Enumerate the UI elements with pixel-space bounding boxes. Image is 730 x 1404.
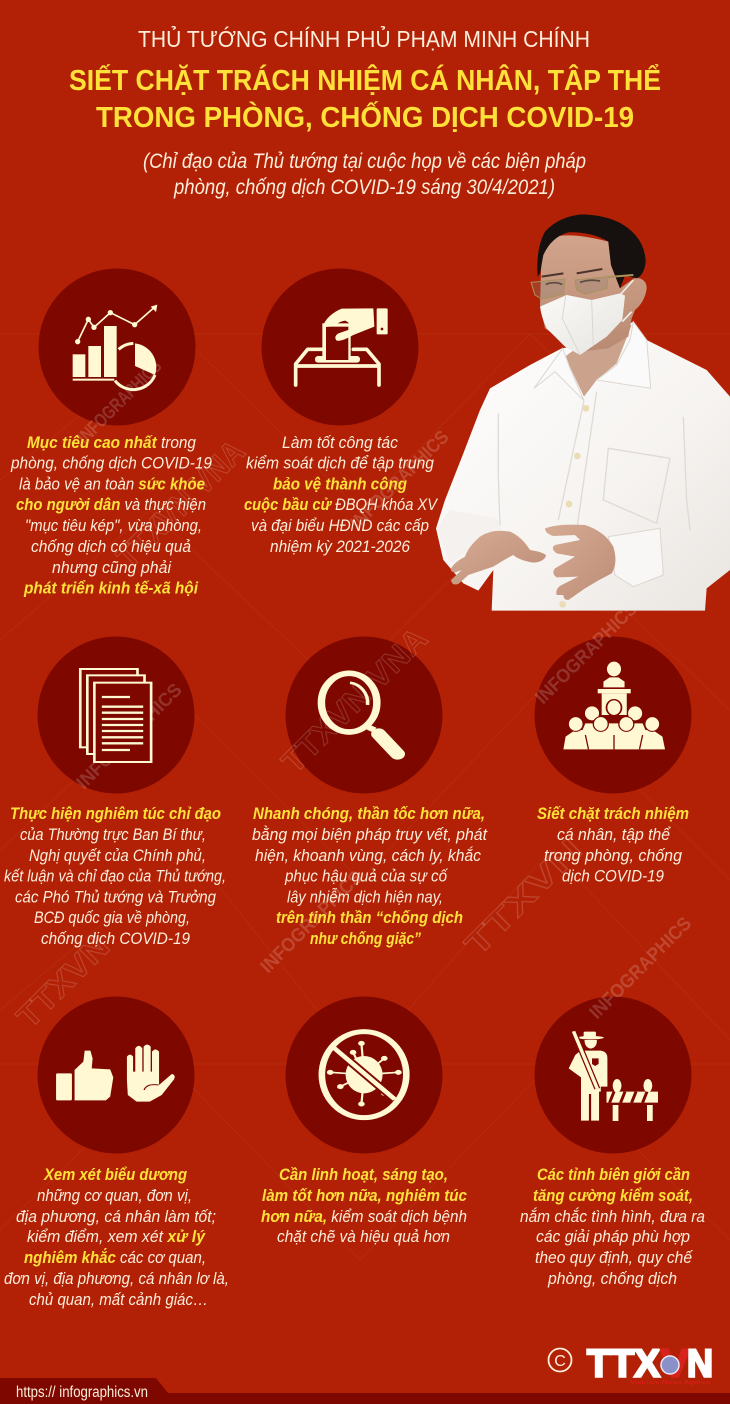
agency tagline: Vietnam News Agency — [630, 1380, 712, 1386]
icon: magnifier — [321, 673, 398, 754]
text: highest goal: "mục tiêu kép", vừa phòng, — [25, 517, 202, 535]
text: speed: hiện, khoanh vùng, cách ly, khắc — [255, 846, 482, 865]
watermarks — [9, 356, 696, 1035]
text: directives: kết luận và chỉ đạo của Thủ tướng, — [4, 868, 226, 886]
text: directives: của Thường trực Ban Bí thư, — [20, 826, 206, 844]
icon: copyright symbol: C — [554, 1353, 566, 1370]
text: border control: tăng cường kiểm soát, — [533, 1187, 693, 1205]
logo globe — [661, 1356, 679, 1374]
logo letter N: N — [687, 1342, 713, 1386]
watermarks: INFOGRAPHICS — [586, 913, 696, 1024]
watermarks: INFOGRAPHICS — [257, 867, 367, 978]
text: responsibility — [537, 805, 689, 886]
text: directives: chống dịch COVID-19 — [41, 930, 190, 948]
text: election: và đại biểu HĐND các cấp — [251, 517, 429, 535]
text: highest goal: Mục tiêu cao nhất trong — [27, 434, 197, 452]
text: directives — [4, 805, 226, 948]
logo letter V: V — [661, 1342, 689, 1386]
panel: responsibility — [537, 662, 689, 886]
hands — [451, 525, 615, 600]
panel: circles background row 1 — [38, 268, 418, 426]
text: flexible control: làm tốt hơn nữa, nghiêm túc — [262, 1187, 467, 1205]
text: highest goal: chống dịch có hiệu quả — [31, 538, 191, 556]
shirt — [436, 322, 730, 611]
panel: directives — [4, 669, 226, 948]
text: directives: các Phó Thủ tướng và Trưởng — [15, 888, 217, 906]
text: flexible control — [261, 1166, 467, 1246]
text: commend and discipline: những cơ quan, đơn vị, — [37, 1187, 192, 1205]
logo text TTX: TTX — [587, 1342, 660, 1386]
text: border control: Các tỉnh biên giới cần — [537, 1166, 690, 1184]
icon: documents — [80, 669, 151, 762]
logo: copyright TTXVN — [548, 1342, 713, 1386]
photo: Prime Minister in white shirt and mask — [436, 214, 730, 611]
text: highest goal: phòng, chống dịch COVID-19 — [10, 454, 212, 472]
watermarks: TTXVN — [9, 928, 116, 1035]
text: border control: nắm chắc tình hình, đưa ra — [520, 1207, 705, 1226]
text: commend and discipline: chủ quan, mất cảnh giác… — [29, 1291, 208, 1309]
subtitle line 2: phòng, chống dịch COVID-19 sáng 30/4/2021) — [173, 176, 555, 199]
icon: thumbs up and stop hand — [56, 1045, 175, 1102]
text: speed: lây nhiễm dịch hiện nay, — [287, 888, 443, 906]
subtitle line 1: (Chỉ đạo của Thủ tướng tại cuộc họp về các biện pháp — [143, 150, 586, 173]
panel: circles background row 3 — [38, 996, 692, 1154]
header — [69, 24, 661, 199]
text: commend and discipline: địa phương, cá nhân làm tốt; — [16, 1208, 216, 1226]
watermarks: INFOGRAPHICS — [73, 680, 187, 794]
panel: commend and discipline — [4, 1045, 229, 1309]
text: responsibility: Siết chặt trách nhiệm — [537, 805, 689, 823]
icon: border guard and barrier — [569, 1031, 658, 1121]
text: speed: bằng mọi biện pháp truy vết, phát — [252, 825, 488, 844]
text: highest goal: nhưng cũng phải — [52, 559, 172, 577]
icon: chart and pie — [73, 305, 157, 390]
text: flexible control: Cần linh hoạt, sáng tạo, — [279, 1166, 448, 1184]
text: speed — [252, 805, 488, 948]
icon: speaker and audience — [563, 662, 665, 749]
text: border control — [520, 1166, 705, 1288]
watermarks: INFOGRAPHICS — [532, 598, 642, 709]
text: election: cuộc bầu cử ĐBQH khóa XV — [244, 496, 439, 514]
panel: speed — [252, 673, 488, 948]
text: election: bảo vệ thành công — [273, 476, 407, 494]
text: flexible control: chặt chẽ và hiệu quả hơn — [277, 1228, 450, 1246]
text: border control: các giải pháp phù hợp — [536, 1228, 690, 1246]
panel: highest goal — [10, 305, 212, 598]
text: directives: Thực hiện nghiêm túc chỉ đạo — [10, 805, 221, 823]
text: commend and discipline — [4, 1166, 229, 1309]
text: election — [244, 434, 439, 556]
watermarks: TTXVN — [457, 831, 589, 963]
text: commend and discipline: đơn vị, địa phương, cá nhân lơ là, — [4, 1270, 229, 1288]
footer bar — [0, 1378, 730, 1404]
website url: https:// infographics.vn — [16, 1384, 148, 1401]
text: speed: như chống giặc” — [310, 930, 422, 948]
text: directives: BCĐ quốc gia về phòng, — [34, 909, 190, 927]
text: speed: phục hậu quả của sự cố — [284, 868, 449, 886]
panel: border control — [520, 1031, 705, 1288]
watermarks: INFOGRAPHICS — [74, 356, 166, 449]
text: responsibility: cá nhân, tập thể — [557, 826, 671, 844]
text: highest goal: phát triển kinh tế-xã hội — [23, 580, 198, 598]
watermarks: TTXVN VNA — [109, 433, 252, 575]
icon: ballot box — [296, 308, 388, 385]
text: election: nhiệm kỳ 2021-2026 — [270, 538, 411, 556]
text: border control: theo quy định, quy chế — [535, 1249, 694, 1267]
text: election: Làm tốt công tác — [282, 434, 399, 452]
text: election: kiểm soát dịch để tập trung — [246, 454, 435, 472]
watermarks: INFOGRAPHICS — [347, 427, 453, 534]
main title line 1: SIẾT CHẶT TRÁCH NHIỆM CÁ NHÂN, TẬP THỂ — [69, 63, 661, 97]
panel: circles background row 2 — [38, 636, 692, 794]
text: responsibility: dịch COVID-19 — [562, 868, 664, 886]
text: flexible control: hơn nữa, kiểm soát dịch bệnh — [261, 1208, 467, 1226]
icon: copyright symbol — [548, 1348, 572, 1372]
text: highest goal: cho người dân và thực hiện — [16, 496, 206, 514]
supertitle: THỦ TƯỚNG CHÍNH PHỦ PHẠM MINH CHÍNH — [138, 24, 590, 52]
text: commend and discipline: nghiêm khắc các cơ quan, — [24, 1248, 206, 1267]
text: commend and discipline: Xem xét biểu dương — [43, 1166, 187, 1184]
icon: virus prohibited — [322, 1032, 406, 1118]
footer band — [0, 1378, 730, 1404]
watermarks: TTXVN VNA — [274, 620, 434, 780]
text: highest goal — [10, 434, 212, 598]
head with hair, glasses and mask — [531, 214, 647, 355]
text: directives: Nghị quyết của Chính phủ, — [29, 847, 206, 865]
background watermark grid — [0, 334, 730, 1260]
text: speed: Nhanh chóng, thần tốc hơn nữa, — [253, 805, 485, 823]
main title line 2: TRONG PHÒNG, CHỐNG DỊCH COVID-19 — [96, 100, 634, 134]
text: highest goal: là bảo vệ an toàn sức khỏe — [19, 476, 205, 494]
panel: flexible control — [261, 1032, 467, 1246]
text: responsibility: trong phòng, chống — [544, 847, 683, 865]
text: border control: phòng, chống dịch — [547, 1270, 677, 1288]
panel: election — [244, 308, 439, 556]
text: speed: trên tinh thần “chống dịch — [276, 909, 463, 927]
text: commend and discipline: kiểm điểm, xem xét xử lý — [27, 1228, 206, 1246]
